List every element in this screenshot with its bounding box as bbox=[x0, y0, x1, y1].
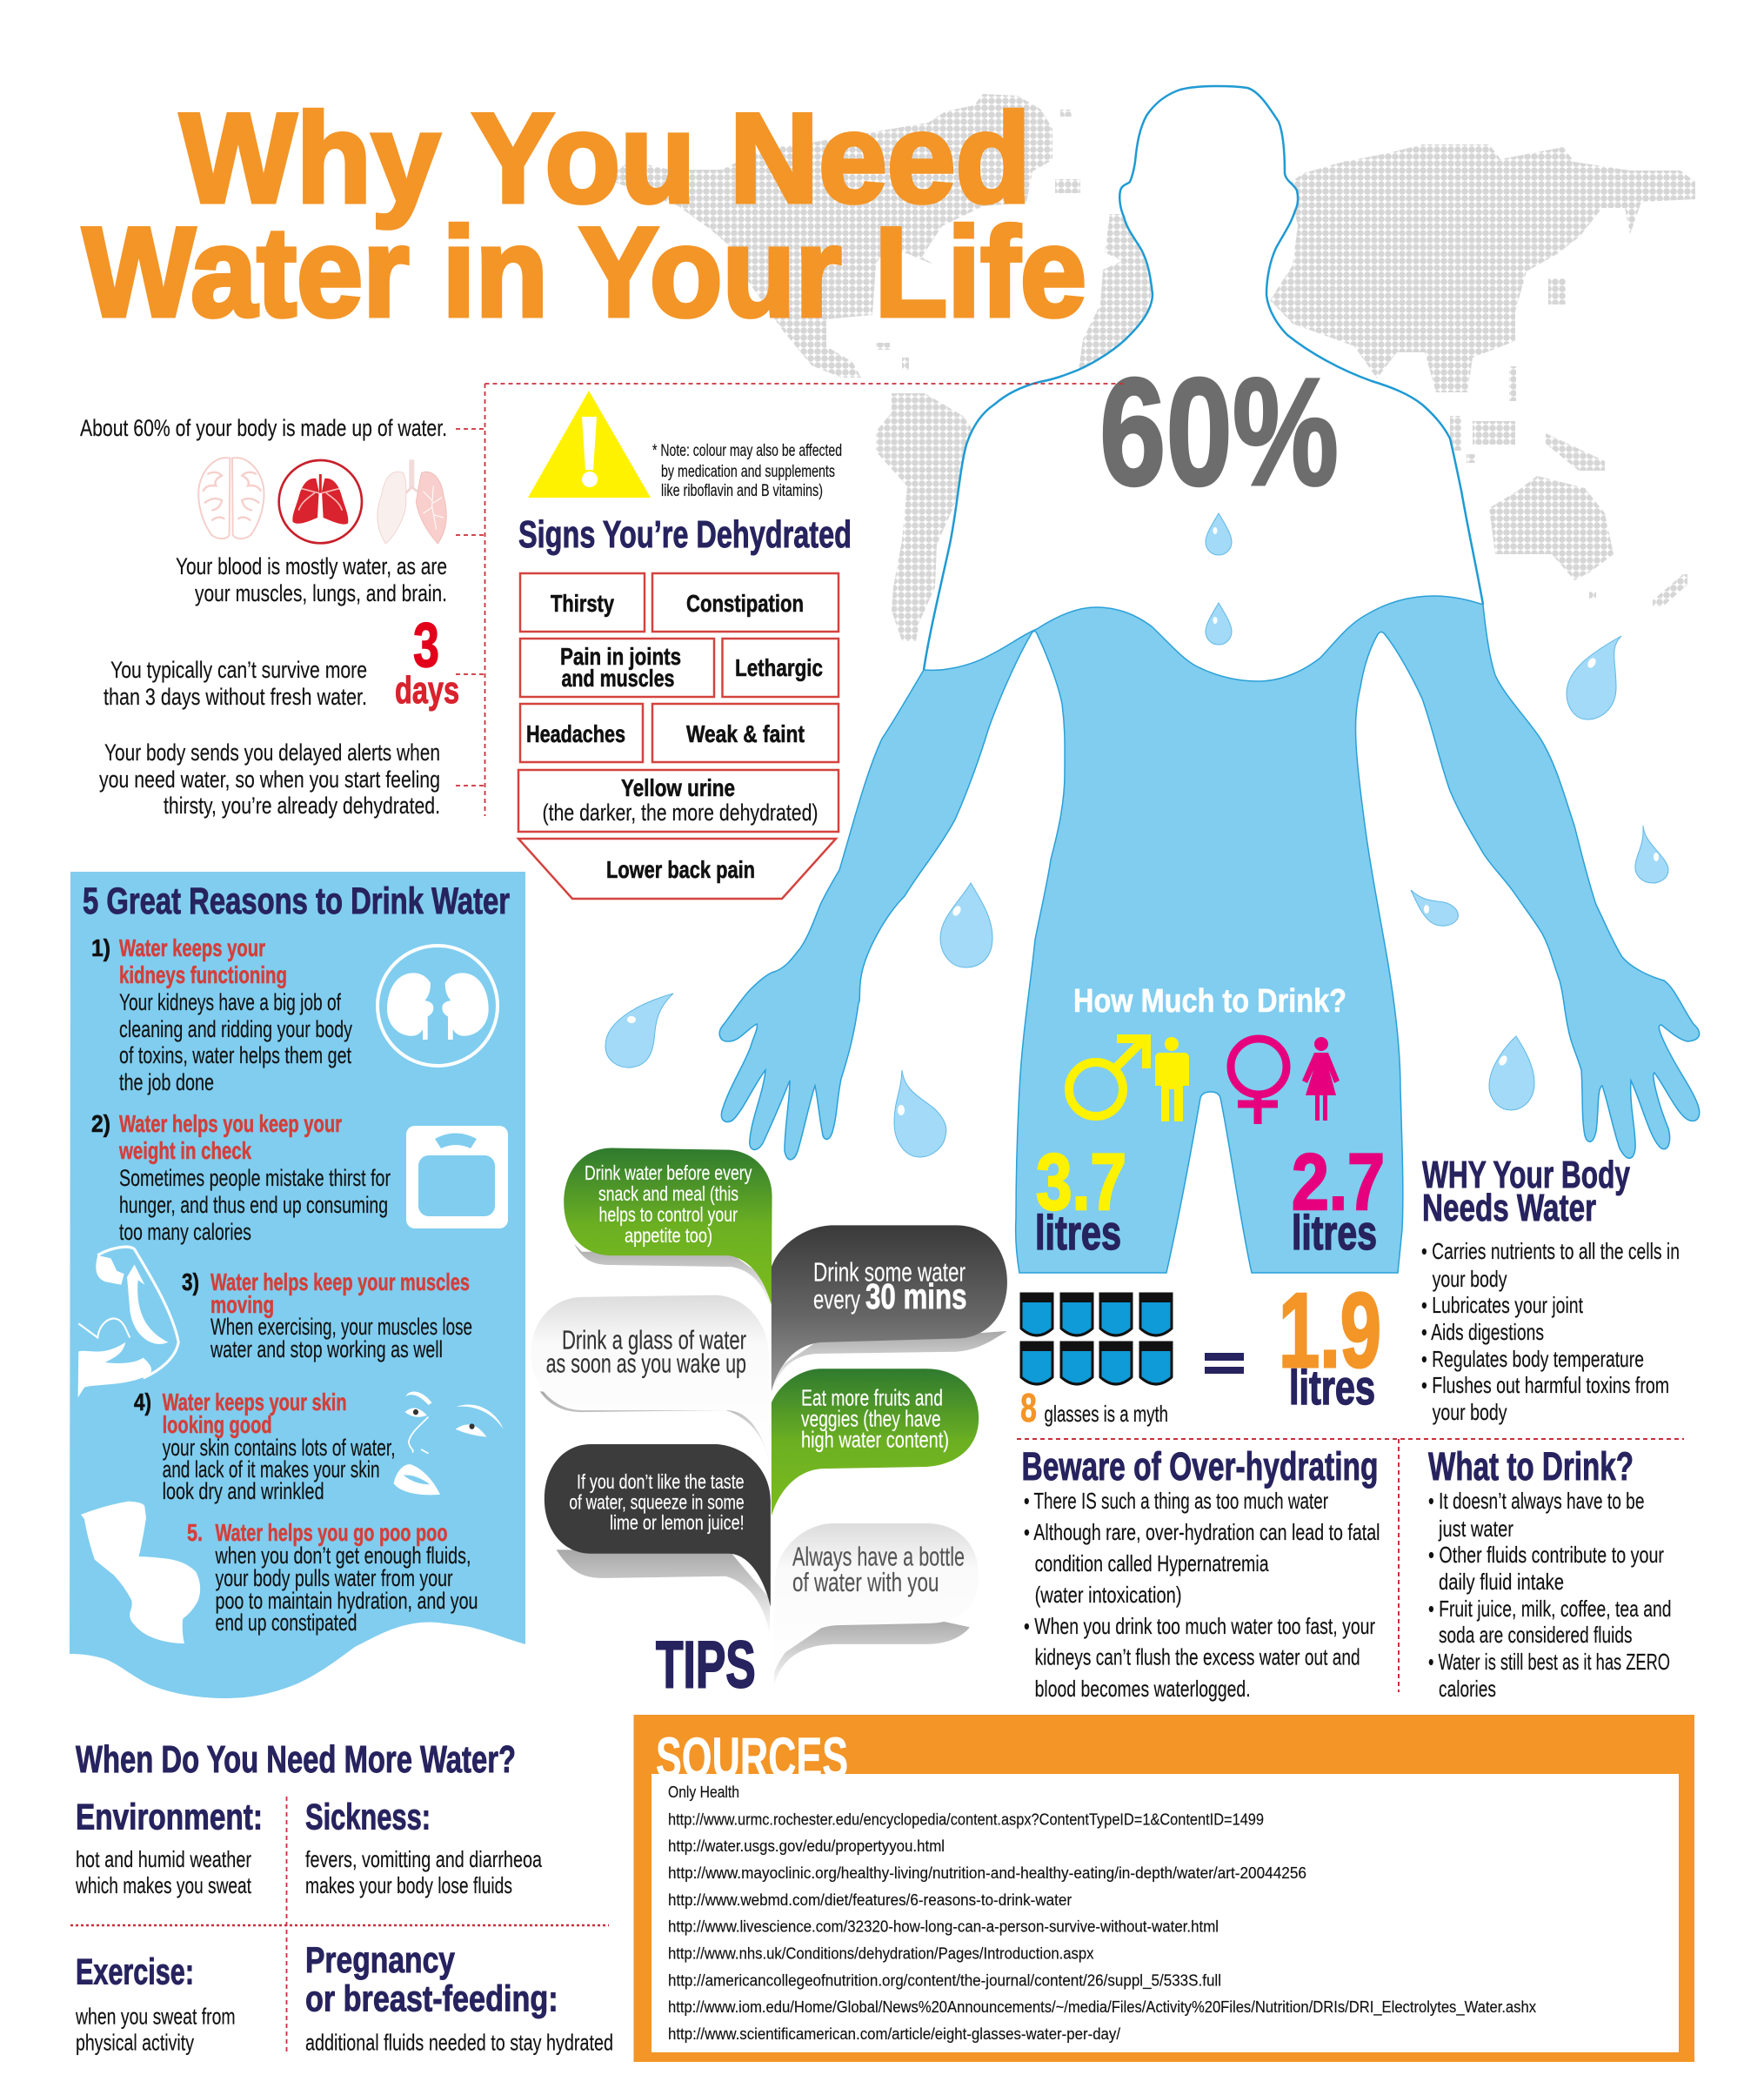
panel: how much to drink: How Much to Drink? bbox=[1073, 983, 1346, 1020]
panel: why your body needs water bbox=[1421, 1154, 1680, 1425]
tip: before every snack: snack and meal (this bbox=[598, 1182, 738, 1205]
icon: lungs in red circle bbox=[279, 460, 362, 543]
icon: warning triangle bbox=[528, 391, 651, 498]
tip: before every snack: appetite too) bbox=[625, 1224, 712, 1247]
panel: beware of over-hydrating: (water intoxication) bbox=[1035, 1582, 1182, 1608]
panel: beware of over-hydrating: Beware of Over-hydrating bbox=[1021, 1444, 1378, 1489]
reason 5: when you don’t get enough fluids, bbox=[215, 1543, 471, 1569]
icon: weighing scale bbox=[406, 1126, 508, 1228]
panel background with wave bbox=[70, 872, 525, 1698]
panel: what to drink: • Fruit juice, milk, coffee, tea and bbox=[1428, 1596, 1672, 1622]
pregnancy: additional fluids needed to stay hydrated bbox=[305, 2030, 613, 2056]
tip: fruits and veggies: Eat more fruits and bbox=[801, 1385, 943, 1411]
pregnancy bbox=[305, 1939, 613, 2056]
source list: http://www.webmd.com/diet/features/6-reasons-to-drink-water bbox=[668, 1891, 1072, 1909]
reason 3: Water helps keep your muscles bbox=[210, 1268, 470, 1295]
intro text: body facts: your muscles, lungs, and brain. bbox=[195, 580, 447, 606]
icon: toilet bbox=[81, 1502, 200, 1643]
panel: what to drink: • Water is still best as it has ZERO bbox=[1428, 1649, 1670, 1675]
panel: what to drink: What to Drink? bbox=[1428, 1444, 1634, 1489]
reason 1 bbox=[91, 934, 498, 1095]
reason 2: 2) bbox=[91, 1110, 110, 1137]
sign boxes bbox=[518, 573, 839, 899]
reason 5 bbox=[81, 1502, 478, 1643]
reason 1: Water keeps your bbox=[119, 934, 265, 961]
intro text: body facts: Your body sends you delayed alerts when bbox=[104, 740, 440, 766]
sickness: makes your body lose fluids bbox=[305, 1872, 512, 1898]
tip: before every snack bbox=[585, 1161, 752, 1247]
icon: flexed arm bbox=[78, 1247, 178, 1397]
note: like riboflavin and B vitamins) bbox=[661, 482, 823, 500]
exercise: Exercise: bbox=[76, 1951, 194, 1992]
icon: kidneys bbox=[378, 946, 498, 1066]
tip: lime or lemon: If you don’t like the taste bbox=[577, 1470, 745, 1493]
reason 2: weight in check bbox=[118, 1137, 251, 1164]
sickness: fevers, vomitting and diarrheoa bbox=[305, 1846, 542, 1872]
panel: tips speech bubbles bbox=[531, 1148, 1007, 1703]
3 days callout: days bbox=[395, 669, 459, 712]
note bbox=[652, 442, 842, 500]
tip: lime or lemon: of water, squeeze in some bbox=[569, 1491, 745, 1514]
panel: what to drink: soda are considered fluids bbox=[1439, 1622, 1632, 1648]
sign boxes: Headaches bbox=[526, 720, 625, 747]
bubble shapes bbox=[531, 1148, 1007, 1690]
sign boxes: Yellow urine bbox=[621, 774, 735, 801]
panel: beware of over-hydrating: • Although rare, over-hydration can lead to fatal bbox=[1024, 1519, 1380, 1545]
sickness: Sickness: bbox=[305, 1797, 431, 1837]
3 days callout: 3 bbox=[413, 611, 439, 680]
source list: http://www.urmc.rochester.edu/encyclopedia/content.aspx?ContentTypeID=1&ContentID=1499 bbox=[668, 1811, 1264, 1829]
intro text: body facts: than 3 days without fresh water. bbox=[104, 684, 367, 710]
icon: brain bbox=[198, 458, 264, 539]
tip: every 30 mins: 30 mins bbox=[865, 1276, 967, 1316]
reason 2: Sometimes people mistake thirst for bbox=[119, 1165, 391, 1191]
tip: every 30 mins: every bbox=[813, 1284, 860, 1315]
pregnancy: or breast-feeding: bbox=[305, 1978, 558, 2019]
tip: glass when you wake: Drink a glass of water bbox=[562, 1325, 746, 1355]
title: Water in Your Life bbox=[83, 201, 1086, 343]
reason 2: hunger, and thus end up consuming bbox=[119, 1192, 388, 1218]
tip: glass when you wake bbox=[546, 1325, 746, 1378]
panel: what to drink: just water bbox=[1438, 1516, 1513, 1542]
panel: 5 great reasons to drink water: 5 Great Reasons to Drink Water bbox=[83, 880, 510, 922]
reason 2 bbox=[91, 1110, 508, 1245]
reason 5: 5. bbox=[187, 1519, 203, 1546]
panel: how much to drink: litres bbox=[1292, 1205, 1377, 1260]
sign boxes: Lethargic bbox=[735, 654, 823, 681]
icon: face bbox=[394, 1392, 504, 1495]
tip: before every snack: helps to control your bbox=[598, 1203, 738, 1226]
panel: how much to drink: litres bbox=[1035, 1205, 1121, 1260]
body outline: head and shoulders bbox=[924, 86, 1483, 670]
source list: http://www.livescience.com/32320-how-long-can-a-person-survive-without-water.html bbox=[668, 1918, 1219, 1936]
60 percent statistic: 60% bbox=[1099, 347, 1339, 518]
reason 1: kidneys functioning bbox=[119, 961, 287, 988]
icon: male symbol and figure bbox=[1069, 1037, 1189, 1121]
source list: Only Health bbox=[668, 1784, 739, 1801]
exercise bbox=[75, 1951, 236, 2056]
tip: glass when you wake: as soon as you wake up bbox=[546, 1348, 746, 1378]
panel: how much to drink: litres bbox=[1289, 1360, 1375, 1415]
panel: what to drink: • It doesn’t always have to be bbox=[1428, 1488, 1644, 1514]
tip: every 30 mins bbox=[813, 1257, 967, 1316]
sign boxes: (the darker, the more dehydrated) bbox=[543, 800, 818, 826]
source list: http://www.scientificamerican.com/article/eight-glasses-water-per-day/ bbox=[668, 2025, 1120, 2043]
reason 4: 4) bbox=[134, 1389, 151, 1415]
panel: beware of over-hydrating: blood becomes waterlogged. bbox=[1035, 1676, 1251, 1702]
reason 3: 3) bbox=[182, 1268, 199, 1295]
reason 4: look dry and wrinkled bbox=[163, 1478, 324, 1504]
reason 3: water and stop working as well bbox=[210, 1336, 443, 1362]
water filling the body bbox=[719, 596, 1700, 1273]
exercise: when you sweat from bbox=[75, 2004, 236, 2030]
panel: what to drink bbox=[1428, 1444, 1672, 1702]
reason 4: your skin contains lots of water, bbox=[163, 1435, 396, 1461]
tip: fruits and veggies: veggies (they have bbox=[801, 1406, 941, 1432]
icon: eight glasses bbox=[1020, 1293, 1173, 1384]
panel: sources: SOURCES bbox=[656, 1725, 848, 1790]
panel: how much to drink: glasses is a myth bbox=[1044, 1401, 1168, 1427]
3 days callout bbox=[395, 611, 459, 712]
reason 5: your body pulls water from your bbox=[216, 1565, 453, 1591]
panel: why your body needs water: • Lubricates your joint bbox=[1421, 1292, 1584, 1318]
intro text: body facts: you need water, so when you start feeling bbox=[99, 766, 440, 793]
title bbox=[83, 87, 1086, 343]
tip: before every snack: Drink water before every bbox=[585, 1161, 752, 1184]
panel: 5 great reasons to drink water bbox=[70, 872, 525, 1698]
reason 1: cleaning and ridding your body bbox=[119, 1016, 352, 1042]
reason 5: end up constipated bbox=[216, 1610, 357, 1636]
panel: why your body needs water: • Flushes out harmful toxins from bbox=[1421, 1372, 1669, 1398]
source list: http://water.usgs.gov/edu/propertyyou.html bbox=[668, 1837, 945, 1855]
panel: how much to drink: 2.7 bbox=[1292, 1138, 1385, 1227]
title: Why You Need bbox=[180, 87, 1031, 229]
sign boxes: Lower back pain bbox=[606, 856, 755, 883]
panel: signs of dehydration: Signs You’re Dehydrated bbox=[518, 513, 852, 556]
reason 5: poo to maintain hydration, and you bbox=[216, 1588, 478, 1614]
sign boxes: and muscles bbox=[562, 665, 675, 692]
source list: http://americancollegeofnutrition.org/content/the-journal/content/26/suppl_5/533S.full bbox=[668, 1972, 1221, 1991]
panel: why your body needs water: • Aids digestions bbox=[1421, 1319, 1544, 1345]
icon: female symbol and figure bbox=[1231, 1037, 1340, 1124]
panel: how much to drink bbox=[1020, 983, 1385, 1430]
tip: lime or lemon: lime or lemon juice! bbox=[610, 1511, 745, 1534]
panel: beware of over-hydrating: • When you drink too much water too fast, your bbox=[1024, 1613, 1375, 1639]
source list: http://www.iom.edu/Home/Global/News%20Announcements/~/media/Files/Activity%20Files/Nutrition/DRIs/DRI_Electrolytes_Water.ashx bbox=[668, 1998, 1536, 2017]
source list: http://www.nhs.uk/Conditions/dehydration/Pages/Introduction.aspx bbox=[668, 1945, 1094, 1963]
environment bbox=[75, 1797, 263, 1898]
reason 2: Water helps you keep your bbox=[119, 1110, 342, 1137]
panel: why your body needs water: your body bbox=[1433, 1266, 1507, 1292]
environment: Environment: bbox=[76, 1797, 263, 1837]
tip: carry a bottle: of water with you bbox=[792, 1567, 939, 1597]
panel: why your body needs water: • Regulates body temperature bbox=[1421, 1346, 1644, 1372]
panel: tips speech bubbles: TIPS bbox=[656, 1629, 756, 1703]
panel: beware of over-hydrating bbox=[1021, 1444, 1380, 1702]
tip: fruits and veggies bbox=[801, 1385, 949, 1452]
sign boxes: Thirsty bbox=[551, 590, 614, 617]
panel: why your body needs water: WHY Your Body bbox=[1422, 1154, 1630, 1196]
reason 1: the job done bbox=[119, 1069, 214, 1095]
note: * Note: colour may also be affected bbox=[652, 442, 842, 460]
pregnancy: Pregnancy bbox=[305, 1939, 456, 1980]
reason 4 bbox=[134, 1389, 504, 1504]
tip: carry a bottle: Always have a bottle bbox=[792, 1542, 965, 1572]
note: by medication and supplements bbox=[661, 463, 835, 481]
panel: why your body needs water: Needs Water bbox=[1422, 1187, 1596, 1229]
panel: sources bbox=[633, 1715, 1694, 2062]
intro text: body facts: Your blood is mostly water, as are bbox=[176, 553, 447, 579]
world map of dots bbox=[605, 94, 1695, 641]
source list: http://www.mayoclinic.org/healthy-living/nutrition-and-healthy-eating/in-depth/water/art-20044256 bbox=[668, 1864, 1306, 1882]
reason 4: and lack of it makes your skin bbox=[163, 1456, 380, 1482]
sign boxes: Pain in joints bbox=[560, 643, 681, 670]
reason 1: 1) bbox=[91, 934, 110, 961]
panel: how much to drink: 3.7 bbox=[1036, 1138, 1126, 1227]
intro text: body facts bbox=[80, 415, 459, 819]
sign boxes: Constipation bbox=[686, 590, 804, 617]
tip: carry a bottle bbox=[792, 1542, 965, 1597]
panel: how much to drink: 8 bbox=[1020, 1385, 1037, 1430]
panel: when do you need more water: When Do You Need More Water? bbox=[76, 1738, 516, 1781]
reason 3 bbox=[78, 1247, 472, 1397]
panel: beware of over-hydrating: condition called Hypernatremia bbox=[1035, 1550, 1269, 1576]
panel: how much to drink: 1.9 bbox=[1279, 1271, 1381, 1389]
reason 3: moving bbox=[210, 1291, 274, 1318]
reason 3: When exercising, your muscles lose bbox=[210, 1314, 472, 1340]
reason 2: too many calories bbox=[119, 1219, 251, 1245]
reason 4: Water keeps your skin bbox=[163, 1389, 347, 1415]
panel: when do you need more water bbox=[70, 1738, 613, 2056]
dashed connector lines bbox=[456, 384, 1124, 816]
tip: fruits and veggies: high water content) bbox=[801, 1426, 949, 1452]
panel: what to drink: calories bbox=[1439, 1676, 1496, 1702]
intro text: body facts: thirsty, you’re already dehydrated. bbox=[164, 793, 440, 819]
equals sign bbox=[1205, 1353, 1244, 1374]
panel: what to drink: daily fluid intake bbox=[1439, 1569, 1564, 1595]
reason 1: Your kidneys have a big job of bbox=[119, 989, 341, 1015]
exercise: physical activity bbox=[76, 2030, 194, 2056]
sickness bbox=[305, 1797, 542, 1898]
source list bbox=[668, 1784, 1536, 2043]
environment: hot and humid weather bbox=[76, 1846, 251, 1872]
panel: beware of over-hydrating: • There IS such a thing as too much water bbox=[1024, 1488, 1328, 1514]
panel: why your body needs water: • Carries nutrients to all the cells in bbox=[1421, 1238, 1680, 1264]
environment: which makes you sweat bbox=[75, 1872, 252, 1898]
sign boxes: Weak & faint bbox=[686, 720, 805, 747]
panel: why your body needs water: your body bbox=[1433, 1399, 1507, 1425]
panel: beware of over-hydrating: kidneys can’t flush the excess water out and bbox=[1035, 1644, 1360, 1670]
reason 1: of toxins, water helps them get bbox=[119, 1042, 351, 1068]
intro text: body facts: About 60% of your body is made up of water. bbox=[80, 415, 447, 441]
tip: every 30 mins: Drink some water bbox=[813, 1257, 966, 1288]
reason 4: looking good bbox=[163, 1411, 272, 1438]
human body with water level bbox=[719, 86, 1700, 1273]
reason 5: Water helps you go poo poo bbox=[216, 1519, 447, 1546]
tip: lime or lemon bbox=[569, 1470, 745, 1534]
panel: what to drink: • Other fluids contribute to your bbox=[1428, 1542, 1664, 1568]
icon: lungs illustration bbox=[378, 459, 446, 544]
intro text: body facts: You typically can’t survive more bbox=[110, 657, 367, 683]
panel: signs of dehydration bbox=[518, 391, 852, 899]
water drops bbox=[605, 513, 1668, 1157]
